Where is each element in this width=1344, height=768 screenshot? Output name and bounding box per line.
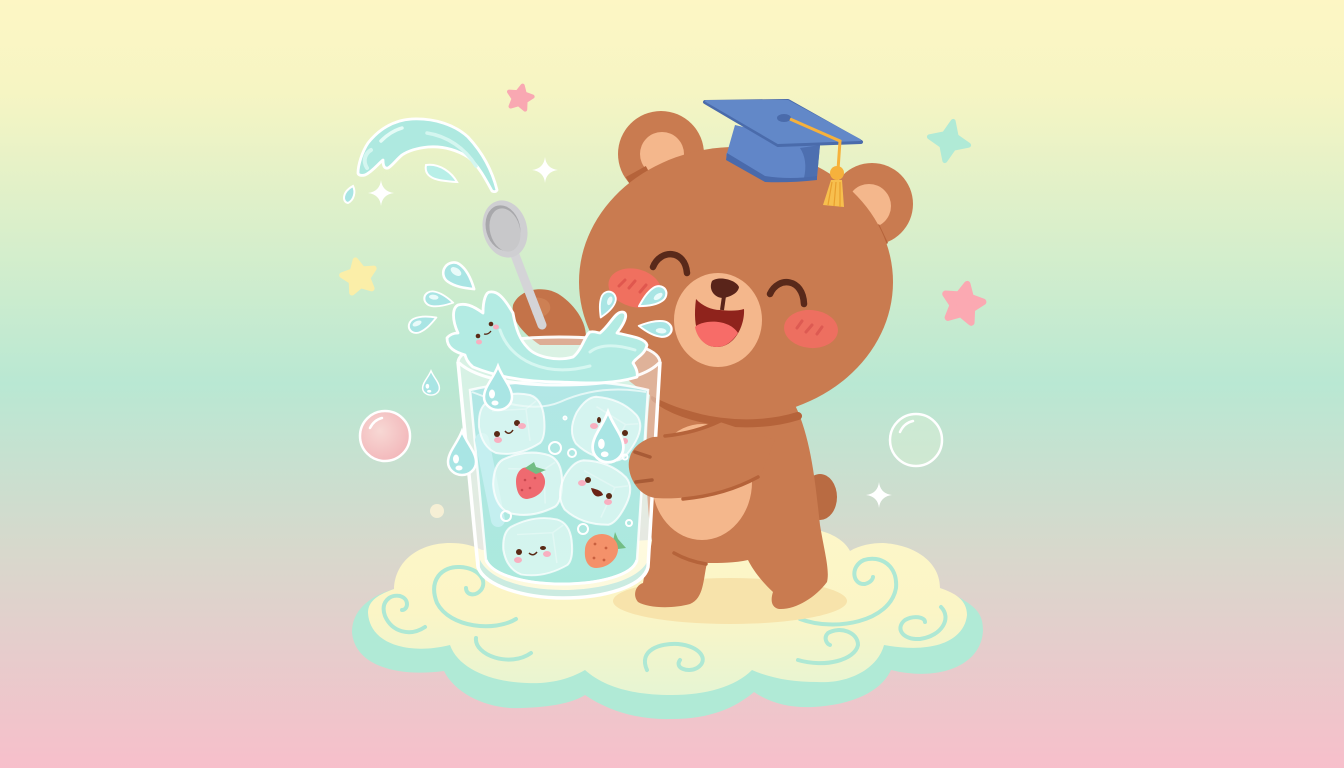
collar line bbox=[655, 398, 798, 423]
glass back bbox=[458, 337, 660, 598]
cheek: left bbox=[604, 263, 666, 313]
bear belly bbox=[652, 424, 752, 540]
bear hand on spoon bbox=[531, 298, 550, 317]
ice cube: smile bbox=[549, 448, 639, 537]
splash face bbox=[476, 322, 499, 344]
ear: left bbox=[618, 111, 704, 197]
star: yellow bbox=[340, 257, 378, 294]
leg crease bbox=[674, 553, 706, 564]
eye: right bbox=[770, 282, 804, 304]
cloud swirls bbox=[384, 559, 945, 670]
ice cube: face two bbox=[561, 385, 649, 472]
ear: right bbox=[831, 163, 913, 245]
front arm bbox=[629, 421, 775, 499]
ground shadow bbox=[613, 578, 847, 624]
water arc splash bbox=[344, 119, 497, 203]
glass reflection bbox=[482, 440, 498, 520]
water drops in glass bbox=[423, 366, 623, 475]
flying droplets left bbox=[406, 258, 481, 336]
cloud platform bbox=[352, 530, 983, 719]
star: pink right bbox=[941, 280, 986, 324]
bubble: right bbox=[890, 414, 942, 466]
ice cube: wink bbox=[503, 518, 572, 575]
sparkle: right bbox=[866, 482, 892, 508]
nose bbox=[711, 279, 739, 310]
bear head bbox=[579, 147, 893, 417]
glass of water bbox=[447, 292, 660, 598]
star: pink top bbox=[506, 83, 534, 110]
strawberry bbox=[585, 532, 626, 568]
bear body and legs bbox=[635, 395, 828, 609]
bear bbox=[513, 101, 913, 609]
cloud: mint underside bbox=[352, 588, 983, 719]
eye: left bbox=[653, 254, 687, 273]
sparkle: left bbox=[368, 180, 394, 206]
spoon bbox=[476, 195, 542, 325]
ice cube: face one bbox=[479, 394, 544, 454]
muzzle bbox=[674, 273, 762, 367]
air bubbles bbox=[501, 416, 632, 534]
splash on top of glass bbox=[447, 292, 647, 383]
cloud: cream top bbox=[368, 530, 967, 695]
dot bbox=[430, 504, 444, 518]
water body bbox=[470, 381, 648, 584]
mouth bbox=[695, 299, 744, 347]
graduation cap bbox=[705, 101, 861, 207]
cheek: right bbox=[782, 308, 840, 350]
tassel bbox=[790, 119, 844, 207]
glass bottom tint bbox=[480, 560, 648, 598]
flying droplets right bbox=[595, 283, 672, 338]
raised arm behind glass bbox=[513, 289, 586, 345]
sparkle: top bbox=[532, 157, 558, 183]
water surface bbox=[472, 390, 646, 407]
bear tail bbox=[803, 474, 837, 520]
glass front rim and walls bbox=[458, 337, 660, 598]
star: mint bbox=[925, 117, 973, 165]
ice cube: strawberry bbox=[491, 449, 565, 518]
bubble: left bbox=[360, 411, 410, 461]
